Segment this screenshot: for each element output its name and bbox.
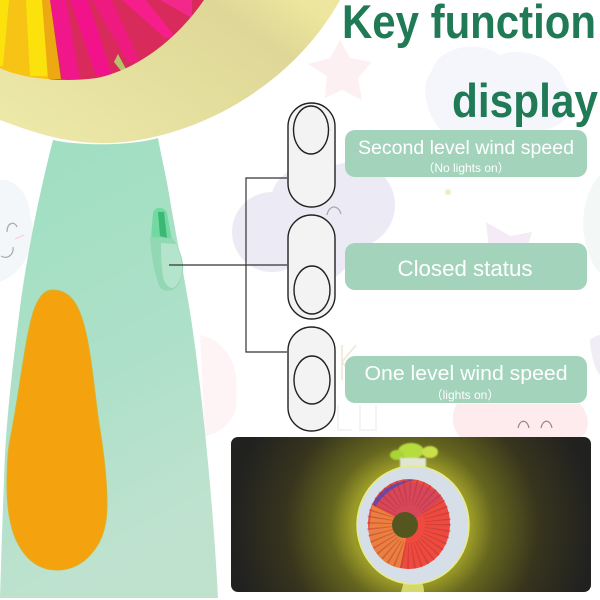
fan handle: [0, 138, 218, 598]
fan handle stub: [401, 580, 424, 592]
lit blades: [368, 479, 450, 569]
label: second level wind speed: [345, 130, 587, 177]
label: second level wind speed: Second level wind speed: [358, 137, 574, 159]
fan ears: [390, 443, 438, 470]
title: [342, 0, 598, 127]
label: one level wind speed: One level wind speed: [364, 363, 568, 385]
label: one level wind speed: [345, 356, 587, 403]
fan blades: [0, 0, 215, 90]
fan ring housing: [0, 0, 340, 143]
slide switch: [150, 208, 183, 291]
lit ring: [357, 466, 469, 584]
label: closed status: Closed status: [398, 256, 532, 281]
connector lines: [169, 178, 287, 352]
fan hub hole: [392, 512, 418, 538]
switch position: closed: [288, 215, 335, 319]
orange button: [7, 290, 107, 570]
switch position: second level: [288, 103, 335, 207]
label: second level wind speed: （No lights on）: [422, 161, 510, 175]
night photo panel: lit fan: [231, 437, 591, 592]
background decoration: pastel clouds and stars: [0, 40, 600, 437]
handle body: [0, 138, 218, 598]
label: closed status: [345, 243, 587, 290]
switch position: one level: [288, 327, 335, 431]
label: one level wind speed: （lights on）: [431, 388, 499, 402]
